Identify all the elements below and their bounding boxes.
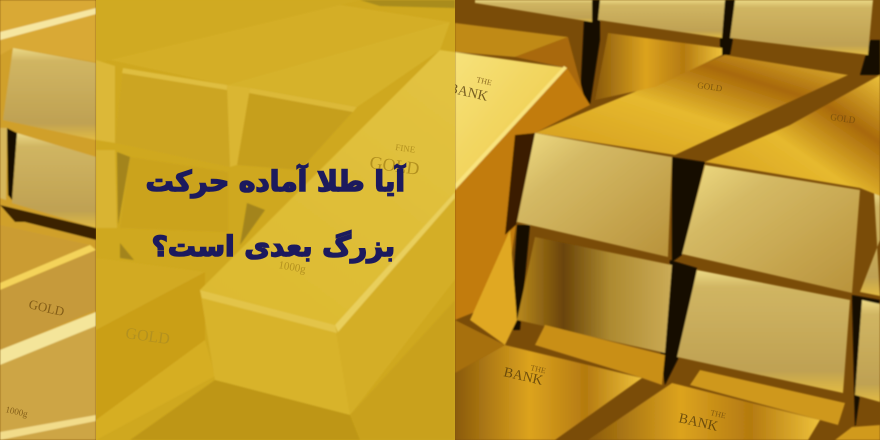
engraved bar lettering: BANK xyxy=(502,365,544,389)
engraved bar lettering: THE xyxy=(476,75,493,87)
panel: upper tan bar faces xyxy=(475,0,880,402)
title xyxy=(146,162,406,264)
panel: translucent yellow overlay xyxy=(96,0,455,440)
overlay bars: lower left xyxy=(96,258,205,330)
panel: big bar side xyxy=(455,68,590,320)
engraved bar lettering: THE xyxy=(710,408,727,420)
panel: dark gaps xyxy=(505,0,880,430)
title line 1: آیا طلا آماده حرکت xyxy=(146,165,405,198)
engraved bar lettering: GOLD xyxy=(27,296,66,319)
engraved bar lettering: 1000g xyxy=(5,404,29,419)
panel: gold bar tops xyxy=(535,55,848,155)
engraving visible through overlay: 1000g xyxy=(277,259,307,276)
overlay bars: second row xyxy=(96,150,117,228)
panel: left strip bars xyxy=(0,0,96,440)
engraved bar lettering: BANK xyxy=(677,411,719,435)
engraved bar lettering: GOLD xyxy=(830,112,856,126)
engraved bar lettering xyxy=(5,75,856,435)
engraving visible through overlay: FINE xyxy=(395,142,416,155)
engraved bar lettering: GOLD xyxy=(697,80,723,94)
overlay bars: upper row xyxy=(96,0,360,62)
engraved bar lettering: THE xyxy=(530,363,547,375)
engraving visible through overlay: GOLD xyxy=(368,152,421,179)
engraved bar lettering: BANK xyxy=(447,81,489,105)
engraving visible through overlay: GOLD xyxy=(124,325,171,348)
title line 2: بزرگ بعدی است؟ xyxy=(152,230,395,263)
overlay bars: big bar xyxy=(200,50,455,325)
engraving visible through overlay xyxy=(124,142,421,348)
